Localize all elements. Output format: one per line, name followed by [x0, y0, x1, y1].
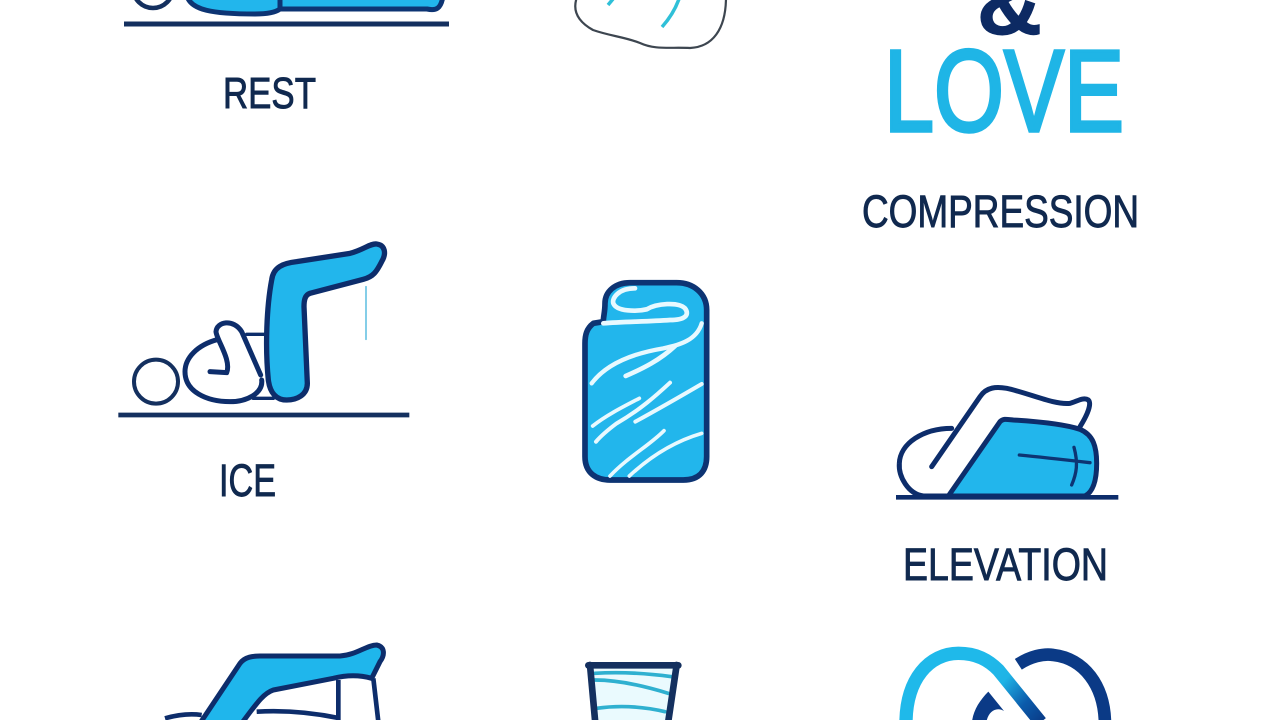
heading: LOVE: LOVE [884, 26, 1124, 156]
icon: love loop symbol, cropped at bottom [906, 653, 1105, 720]
label: COMPRESSION: COMPRESSION [862, 186, 1139, 237]
icon: elevation, leg on pillow [896, 388, 1118, 497]
icon: rest, person lying flat [124, 0, 449, 24]
icon: glass of water, cropped at bottom [588, 665, 678, 720]
label: REST: REST [223, 69, 316, 118]
icon: ice pack [585, 283, 707, 480]
icon: leg raised on support, cropped at bottom [165, 645, 383, 720]
icon: ice, leg raised while lying down [118, 244, 409, 415]
label: ICE: ICE [219, 455, 276, 506]
label: ELEVATION: ELEVATION [903, 539, 1108, 590]
icon: cushion outline [575, 0, 726, 48]
